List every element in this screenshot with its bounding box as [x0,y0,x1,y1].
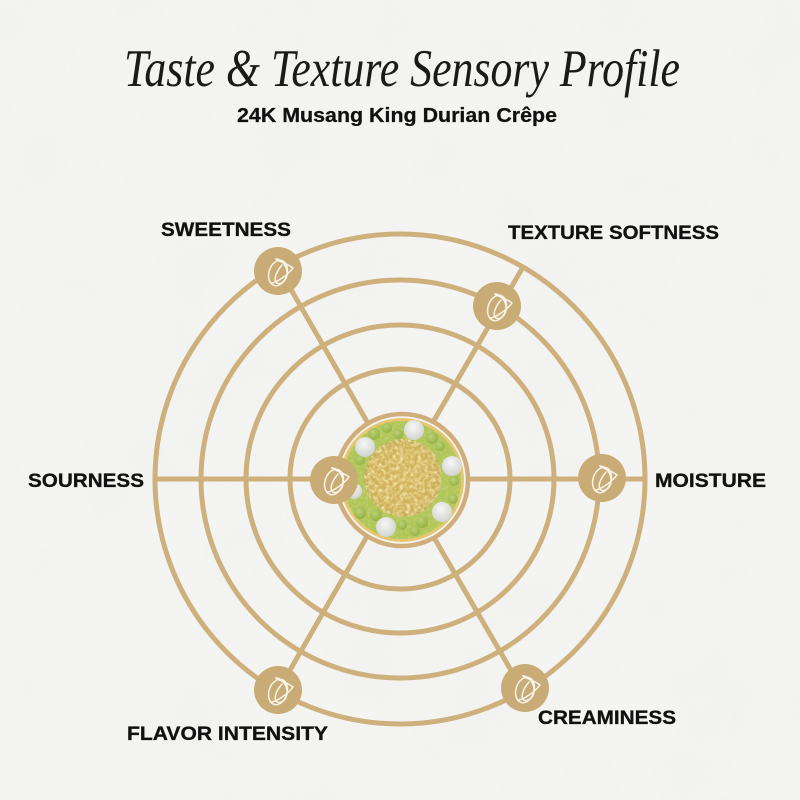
label: texture softness: TEXTURE SOFTNESS [508,223,719,244]
marker: texture softness [473,282,521,330]
pistachio pearls [354,423,459,536]
marker: moisture [578,454,626,502]
marker: creaminess [501,664,549,712]
title: Taste & Texture Sensory Profile [124,40,680,98]
concentric rings [155,234,645,724]
meringue dots [346,420,462,537]
axis labels [28,220,766,745]
marker: sweetness [254,247,302,295]
centre dessert: durian crepe [334,412,470,548]
marker: flavor intensity [254,666,302,714]
axis spokes [155,267,645,691]
marker: sourness [310,456,358,504]
subtitle: 24K Musang King Durian Crêpe [237,105,557,127]
label: sweetness: SWEETNESS [161,220,291,241]
label: sourness: SOURNESS [28,471,144,492]
label: moisture: MOISTURE [655,471,766,492]
label: flavor intensity: FLAVOR INTENSITY [127,724,328,745]
label: creaminess: CREAMINESS [538,708,676,729]
radar chart [155,234,645,724]
